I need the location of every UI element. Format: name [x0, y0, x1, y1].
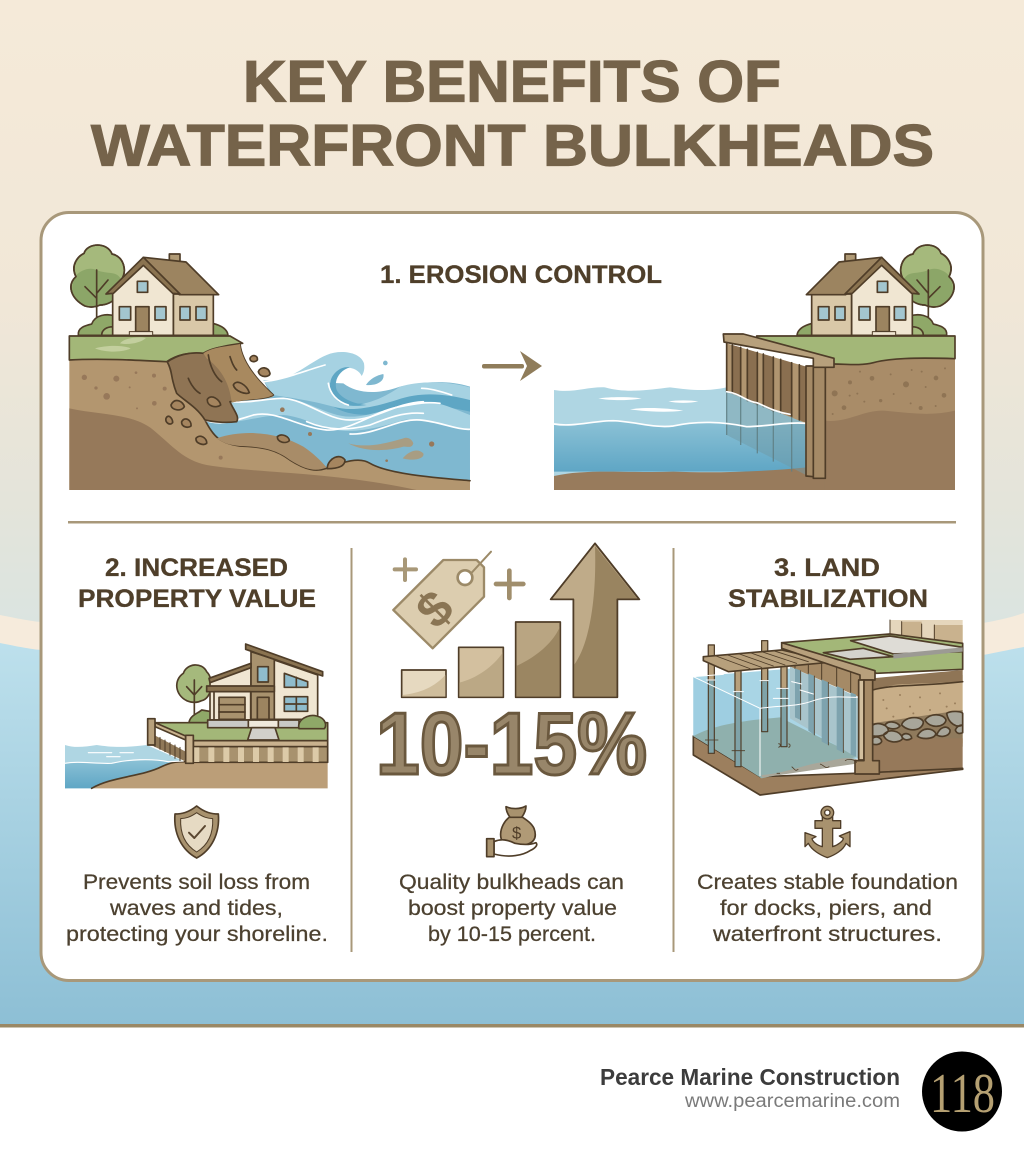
text: value benefit: by 10-15 percent. [428, 923, 596, 946]
title: KEY BENEFITS OF [243, 50, 781, 114]
eroded cliff [167, 344, 273, 422]
house and tree [901, 245, 954, 319]
yard [155, 723, 328, 741]
text: erosion benefit [66, 871, 328, 946]
text: value benefit: Quality bulkheads can [399, 871, 624, 894]
cap beam and front post [806, 366, 813, 477]
icon: anchor [805, 806, 850, 858]
bulkhead wall section [782, 643, 875, 680]
heading: increased property value: PROPERTY VALUE [78, 585, 316, 613]
icon: shield [175, 806, 219, 858]
illustration: waterfront home [65, 644, 328, 788]
text: value benefit [399, 871, 624, 946]
illustration: cutaway of dock and bulkhead [693, 620, 963, 795]
heading: land stabilization: STABILIZATION [728, 585, 928, 613]
heading: increased property value [78, 554, 316, 613]
text: erosion benefit: protecting your shoreline. [66, 923, 328, 946]
heading: land stabilization: 3. LAND [774, 554, 880, 582]
concrete base front [693, 736, 963, 795]
water [554, 387, 807, 477]
arrow: before to after [482, 351, 542, 381]
title [91, 50, 934, 178]
panel: main card [41, 212, 983, 980]
text: stabilization benefit: waterfront structures. [712, 923, 942, 946]
dock posts [708, 641, 787, 767]
grass [757, 336, 955, 365]
house [210, 665, 251, 720]
rocks [166, 356, 345, 469]
illustration: eroding shoreline [69, 245, 470, 490]
text: erosion benefit: waves and tides, [109, 897, 283, 920]
text: stabilization benefit [697, 871, 958, 946]
chart: rising bars, price tag and arrow [393, 543, 639, 697]
soil [825, 358, 955, 490]
heading: increased property value: 2. INCREASED [105, 554, 288, 582]
title: WATERFRONT BULKHEADS [91, 114, 934, 178]
price tag [393, 560, 484, 648]
footer website: www.pearcemarine.com [684, 1091, 900, 1112]
seawall [193, 741, 328, 747]
water surface lines [693, 674, 858, 776]
logo: 118 badge [922, 1052, 1002, 1132]
text: erosion benefit: Prevents soil loss from [83, 871, 310, 894]
logo: 118 badge: 118 [930, 1063, 995, 1125]
column: land stabilization [693, 554, 963, 946]
foundation specks [705, 740, 857, 773]
text: value benefit: boost property value [408, 897, 617, 920]
sheet piles above water [727, 343, 806, 423]
column: increased property value [65, 554, 328, 946]
building wall [890, 620, 963, 643]
sheet piles under water [727, 392, 806, 475]
soil layers [872, 675, 963, 743]
soil specks [82, 371, 434, 462]
footer company name: Pearce Marine Construction [600, 1064, 900, 1090]
grass [69, 336, 243, 362]
divider [68, 521, 956, 524]
heading: land stabilization [728, 554, 928, 613]
tree [177, 665, 211, 702]
text: stabilization benefit: for docks, piers, and [720, 897, 932, 920]
ground top [782, 634, 963, 673]
text: stabilization benefit: Creates stable foundation [697, 871, 958, 894]
soil [69, 360, 470, 490]
sheet piles [788, 649, 860, 697]
rocks [873, 711, 963, 745]
house and tree [71, 245, 124, 319]
chart: rising bars, price tag and arrow: $ [405, 579, 465, 639]
column: property value growth [376, 543, 647, 946]
water box [693, 668, 858, 777]
stat: 10-15%: 10-15% [376, 694, 647, 793]
water [205, 380, 470, 481]
illustration: bulkhead protected shoreline [554, 245, 955, 490]
heading: erosion control: 1. EROSION CONTROL [380, 261, 662, 289]
icon: money bag in hand [487, 806, 537, 857]
sand [554, 467, 827, 490]
icon: money bag in hand: $ [512, 824, 521, 843]
dock deck [703, 650, 825, 672]
footer [0, 1024, 1024, 1154]
